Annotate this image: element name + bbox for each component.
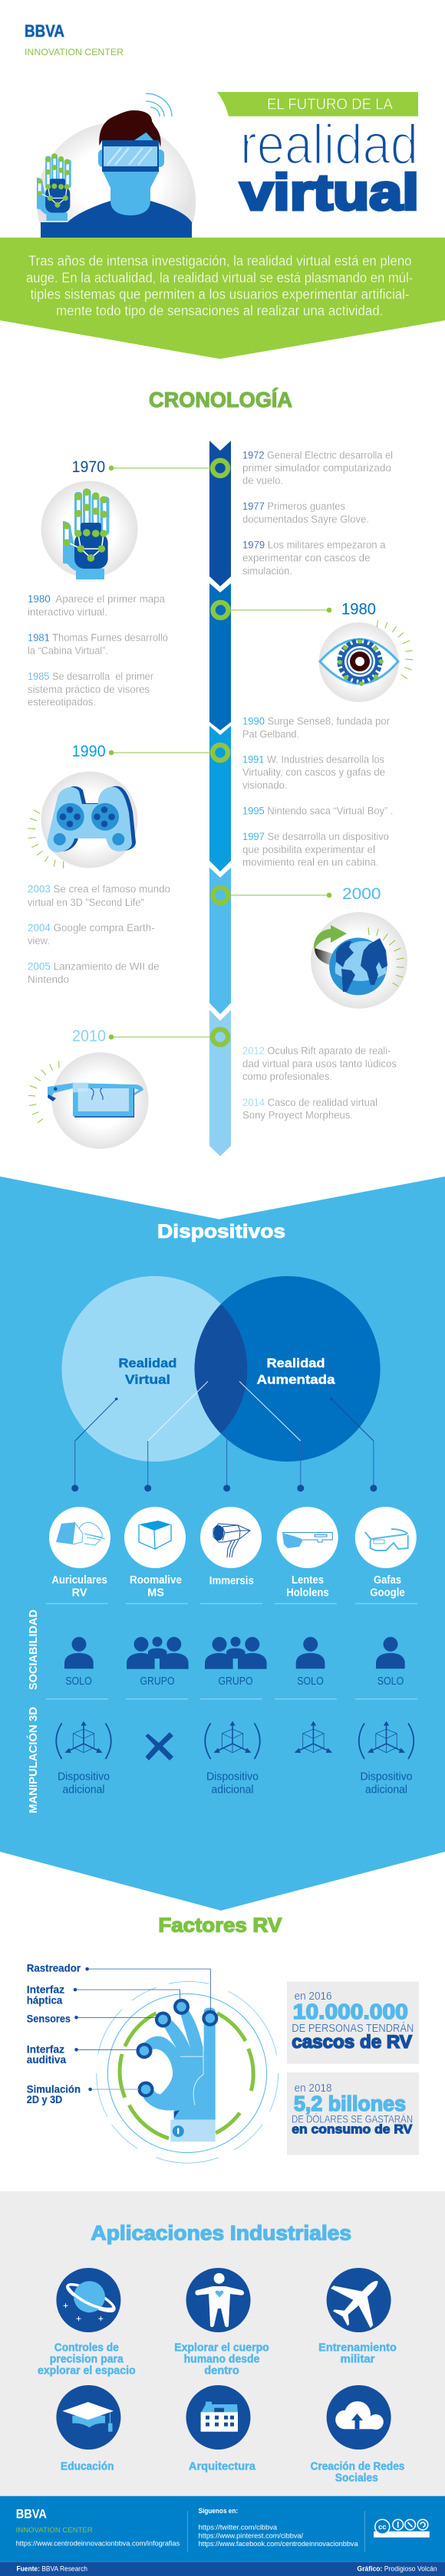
manipulation: additional device bbox=[56, 1721, 111, 1796]
text block: 1972-1979: experimentar con cascos de bbox=[242, 553, 370, 564]
device: Lentes Hololens bbox=[277, 1507, 338, 1600]
application: human body: Explorar el cuerpo bbox=[174, 2341, 269, 2354]
manipulation: built in bbox=[295, 1721, 331, 1753]
labels: hand factors: Interfaz bbox=[27, 2043, 64, 2056]
device: Gafas Google: Gafas bbox=[374, 1574, 401, 1587]
venn diagram: Realidad bbox=[267, 1356, 325, 1370]
source credits: Fuente: BBVA Research bbox=[17, 2565, 87, 2573]
footer logo: INNOVATION CENTER bbox=[16, 2526, 93, 2534]
ribbon: El futuro de la bbox=[217, 92, 418, 116]
text block: 1972-1979: de vuelo. bbox=[242, 475, 283, 487]
panel: Aplicaciones Industriales bbox=[0, 2191, 445, 2496]
text block: 2003-2005: 2003 Se crea el famoso mundo bbox=[28, 884, 170, 895]
panel: green intro band bbox=[0, 238, 445, 359]
icon: mechanical eye bbox=[319, 620, 413, 702]
labels: hand factors: Rastreador bbox=[27, 1962, 81, 1974]
text block: 1972-1979: primer simulador computarizado bbox=[242, 462, 391, 474]
device: Gafas Google bbox=[355, 1507, 417, 1600]
text block: 1980-1985: la “Cabina Virtual”. bbox=[28, 645, 108, 656]
application: military training bbox=[318, 2261, 397, 2365]
device: Gafas Google: Google bbox=[370, 1587, 405, 1600]
title: realidad virtual: realidad bbox=[240, 113, 418, 176]
manipulation: not available bbox=[146, 1732, 173, 1761]
sociability: solo bbox=[64, 1637, 94, 1688]
text block: 1990-1997: que posibilita experimentar el bbox=[242, 844, 375, 855]
application: human body: dentro bbox=[204, 2364, 239, 2377]
application: architecture bbox=[186, 2385, 256, 2473]
icon: smart glasses bbox=[28, 1052, 149, 1149]
device: Roomalive MS: MS bbox=[147, 1587, 164, 1600]
text block: 2003-2005: Nintendo bbox=[28, 973, 69, 986]
text block: 2003-2005 bbox=[28, 884, 170, 986]
application: military training: militar bbox=[341, 2353, 375, 2365]
creative commons badge bbox=[374, 2519, 430, 2538]
application: social networks: Sociales bbox=[335, 2472, 378, 2484]
stat card: 2018: en consumo de RV bbox=[292, 2122, 413, 2136]
timeline marker: 2010 bbox=[72, 1028, 228, 1045]
application: education bbox=[56, 2385, 120, 2473]
heading: Cronología: CRONOLOGÍA bbox=[149, 388, 292, 412]
application: education: Educación bbox=[61, 2460, 114, 2473]
text block: 2012-2014: como profesionales. bbox=[242, 1071, 332, 1082]
diagram: haptic hand bbox=[97, 1981, 279, 2163]
text block: 1980-1985: 1985 Se desarrolla el primer bbox=[28, 671, 153, 682]
timeline spine bbox=[209, 441, 231, 1157]
panel: green intro band: auge. En la actualidad, la realidad virtual se está plasmando en múl- bbox=[26, 270, 413, 285]
heading: Factores RV: Factores RV bbox=[158, 1914, 282, 1937]
text block: 1980-1985: 1981 Thomas Furnes desarrolló bbox=[28, 632, 168, 644]
heading: Dispositivos: Dispositivos bbox=[157, 1221, 285, 1242]
row label: Manipulación 3D: MANIPULACIÓN 3D bbox=[26, 1707, 40, 1813]
device: Lentes Hololens: Hololens bbox=[286, 1587, 329, 1600]
row label: Sociabilidad: SOCIABILIDAD bbox=[27, 1610, 40, 1690]
ribbon: El futuro de la: EL FUTURO DE LA bbox=[267, 97, 394, 113]
venn diagram: Realidad bbox=[118, 1356, 176, 1370]
application: space controls: Controles de bbox=[54, 2341, 119, 2354]
stat card: 2018: DE DÓLARES SE GASTARÁN bbox=[292, 2112, 413, 2125]
footer logo: https://www.centrodeinnovacionbbva.com/infografias bbox=[16, 2540, 180, 2548]
footer social links: https://www.pinterest.com/cibbva/ bbox=[199, 2532, 303, 2540]
application: architecture: Arquitectura bbox=[189, 2460, 256, 2473]
icon: globe with arrow bbox=[311, 912, 407, 1009]
timeline marker: 1970 bbox=[72, 458, 228, 476]
device: Immersis: Immersis bbox=[209, 1575, 254, 1587]
footer social links: Síguenos en: bbox=[199, 2507, 238, 2515]
timeline marker: 1970: 1970 bbox=[72, 458, 105, 476]
application: social networks: Creación de Redes bbox=[311, 2460, 404, 2473]
device: Immersis bbox=[200, 1507, 262, 1587]
timeline marker: 2000: 2000 bbox=[342, 885, 381, 903]
text block: 1972-1979: simulación. bbox=[242, 565, 292, 576]
labels: hand factors: Sensores bbox=[27, 2013, 71, 2025]
logo: BBVA Innovation Center: BBVA bbox=[25, 21, 64, 41]
labels: hand factors: auditiva bbox=[27, 2053, 66, 2066]
footer logo bbox=[16, 2507, 180, 2548]
device: Auriculares RV: Auriculares bbox=[51, 1574, 107, 1587]
venn diagram bbox=[61, 1276, 381, 1462]
text block: 1990-1997 bbox=[242, 715, 393, 868]
manipulation: additional device: adicional bbox=[212, 1784, 253, 1796]
stat card: 2016: cascos de RV bbox=[292, 2032, 412, 2053]
text block: 1972-1979: 1972 General Electric desarrolla el bbox=[242, 449, 393, 461]
logo: BBVA Innovation Center bbox=[25, 21, 124, 57]
text block: 2012-2014: 2012 Oculus Rift aparato de reali- bbox=[242, 1045, 391, 1057]
application: space controls: precision para bbox=[50, 2353, 124, 2365]
sociability: solo bbox=[296, 1637, 325, 1688]
text block: 1972-1979 bbox=[242, 449, 393, 576]
sociability: solo bbox=[376, 1637, 405, 1688]
stat card: 2016 bbox=[287, 1981, 419, 2064]
device: Auriculares RV bbox=[49, 1507, 110, 1600]
panel: green intro band: tiples sistemas que permiten a los usuarios experimentar artificial- bbox=[31, 287, 410, 302]
labels: hand factors: 2D y 3D bbox=[27, 2093, 62, 2105]
panel: Dispositivos bbox=[0, 1176, 445, 1911]
text block: 2012-2014: 2014 Casco de realidad virtual bbox=[242, 1097, 377, 1108]
source credits bbox=[17, 2565, 437, 2573]
timeline marker: 1980 bbox=[213, 601, 376, 619]
sociability: grupo: GRUPO bbox=[140, 1675, 175, 1688]
device: Roomalive MS: Roomalive bbox=[130, 1574, 182, 1587]
text block: 1972-1979: 1979 Los militares empezaron a bbox=[242, 540, 386, 551]
text block: 1990-1997: movimiento real en un cabina. bbox=[242, 857, 379, 868]
footer social links: https://twitter.com/cibbva bbox=[199, 2524, 278, 2532]
device: Lentes Hololens: Lentes bbox=[292, 1574, 324, 1587]
stat card: 2018: 5,2 billones bbox=[294, 2092, 406, 2115]
manipulation: additional device bbox=[359, 1721, 414, 1796]
manipulation: additional device: adicional bbox=[365, 1784, 407, 1796]
panel: green intro band: Tras años de intensa investigación, la realidad virtual está en pleno bbox=[28, 254, 411, 269]
title: realidad virtual: virtual bbox=[240, 163, 419, 220]
text block: 2012-2014 bbox=[242, 1045, 397, 1121]
text block: 1990-1997: Virtuality, con cascos y gafas de bbox=[242, 766, 385, 778]
timeline marker: 1980: 1980 bbox=[341, 601, 376, 619]
text block: 1990-1997: 1991 W. Industries desarrolla los bbox=[242, 753, 384, 765]
source credits: Gráfico: Prodigioso Volcán bbox=[357, 2565, 437, 2573]
timeline marker: 2000 bbox=[213, 885, 381, 903]
manipulation: additional device: Dispositivo bbox=[361, 1770, 413, 1783]
sociability: solo: SOLO bbox=[377, 1675, 404, 1688]
manipulation: additional device bbox=[205, 1721, 260, 1796]
text block: 1980-1985: interactivo virtual. bbox=[28, 606, 107, 618]
labels: hand factors: háptica bbox=[27, 1994, 63, 2006]
footer logo: BBVA bbox=[16, 2507, 47, 2522]
logo: BBVA Innovation Center: INNOVATION CENTER bbox=[25, 48, 124, 57]
panel: green intro band: mente todo tipo de sensaciones al realizar una actividad. bbox=[56, 304, 383, 319]
leader lines from venn to devices bbox=[71, 1381, 377, 1491]
icon: game controller bbox=[28, 772, 137, 868]
icon: sensor glove bbox=[41, 481, 138, 579]
text block: 1980-1985: estereotipados. bbox=[28, 697, 96, 708]
text block: 1980-1985: 1980 Aparece el primer mapa bbox=[28, 593, 165, 605]
text block: 1980-1985: sistema práctico de visores bbox=[28, 684, 150, 695]
stat card: 2018 bbox=[287, 2072, 419, 2155]
text block: 1972-1979: documentados Sayre Glove. bbox=[242, 514, 369, 525]
title: realidad virtual bbox=[240, 113, 419, 220]
application: space controls: explorar el espacio bbox=[38, 2364, 136, 2377]
timeline marker: 2010: 2010 bbox=[72, 1028, 106, 1045]
labels: hand factors bbox=[27, 1962, 210, 2105]
text block: 2003-2005: virtual en 3D "Second Life" bbox=[28, 897, 144, 908]
timeline marker: 1990 bbox=[72, 743, 228, 760]
footer bbox=[0, 2496, 445, 2576]
labels: hand factors: Interfaz bbox=[27, 1984, 64, 1996]
text block: 2012-2014: dad virtual para usos tanto lúdicos bbox=[242, 1058, 397, 1070]
application: human body: humano desde bbox=[184, 2353, 259, 2365]
text block: 1990-1997: 1990 Surge Sense8, fundada por bbox=[242, 715, 390, 727]
venn diagram: Aumentada bbox=[256, 1373, 335, 1387]
sociability: grupo bbox=[205, 1637, 267, 1688]
text block: 1980-1985 bbox=[28, 593, 168, 708]
text block: 1990-1997: 1995 Nintendo saca “Virtual Boy” . bbox=[242, 805, 393, 817]
sociability: solo: SOLO bbox=[65, 1675, 92, 1688]
sociability: grupo bbox=[127, 1637, 189, 1688]
text block: 2003-2005: 2004 Google compra Earth- bbox=[28, 922, 155, 934]
manipulation: additional device: Dispositivo bbox=[58, 1770, 110, 1783]
sociability: solo: SOLO bbox=[297, 1675, 324, 1688]
application: social networks bbox=[311, 2385, 404, 2484]
device: Auriculares RV: RV bbox=[72, 1587, 87, 1600]
text block: 2012-2014: Sony Proyect Morpheus. bbox=[242, 1110, 353, 1121]
text block: 1972-1979: 1977 Primeros guantes bbox=[242, 500, 345, 512]
heading: Aplicaciones Industriales: Aplicaciones Industriales bbox=[91, 2221, 351, 2244]
text block: 2003-2005: view. bbox=[28, 935, 50, 947]
timeline marker: 1990: 1990 bbox=[72, 743, 106, 760]
application: human body bbox=[174, 2268, 269, 2377]
manipulation: additional device: Dispositivo bbox=[206, 1770, 259, 1783]
illustration: man wearing VR headset bbox=[37, 94, 196, 239]
application: military training: Entrenamiento bbox=[318, 2341, 397, 2354]
manipulation: additional device: adicional bbox=[63, 1784, 104, 1796]
text block: 2003-2005: 2005 Lanzamiento de WII de bbox=[28, 961, 160, 973]
footer social links bbox=[199, 2507, 358, 2548]
labels: hand factors: Simulación bbox=[27, 2082, 81, 2095]
device: Roomalive MS bbox=[124, 1507, 186, 1600]
footer social links: https://www.facebook.com/centrodeinnovacionbbva bbox=[199, 2540, 358, 2548]
sociability: grupo: GRUPO bbox=[218, 1675, 253, 1688]
stat card: 2016: 10.000.000 bbox=[293, 2000, 408, 2023]
venn diagram: Virtual bbox=[125, 1373, 170, 1387]
text block: 1990-1997: 1997 Se desarrolla un dispositivo bbox=[242, 831, 389, 842]
stat card: 2016: DE PERSONAS TENDRÁN bbox=[292, 2022, 414, 2035]
creative commons badge: cc bbox=[378, 2523, 387, 2532]
text block: 1990-1997: visionado. bbox=[242, 779, 287, 791]
application: space controls bbox=[38, 2268, 136, 2377]
text block: 1990-1997: Pat Gelband. bbox=[242, 728, 299, 740]
stat card: 2018: en 2018 bbox=[295, 2082, 332, 2095]
stat card: 2016: en 2016 bbox=[295, 1990, 332, 2003]
